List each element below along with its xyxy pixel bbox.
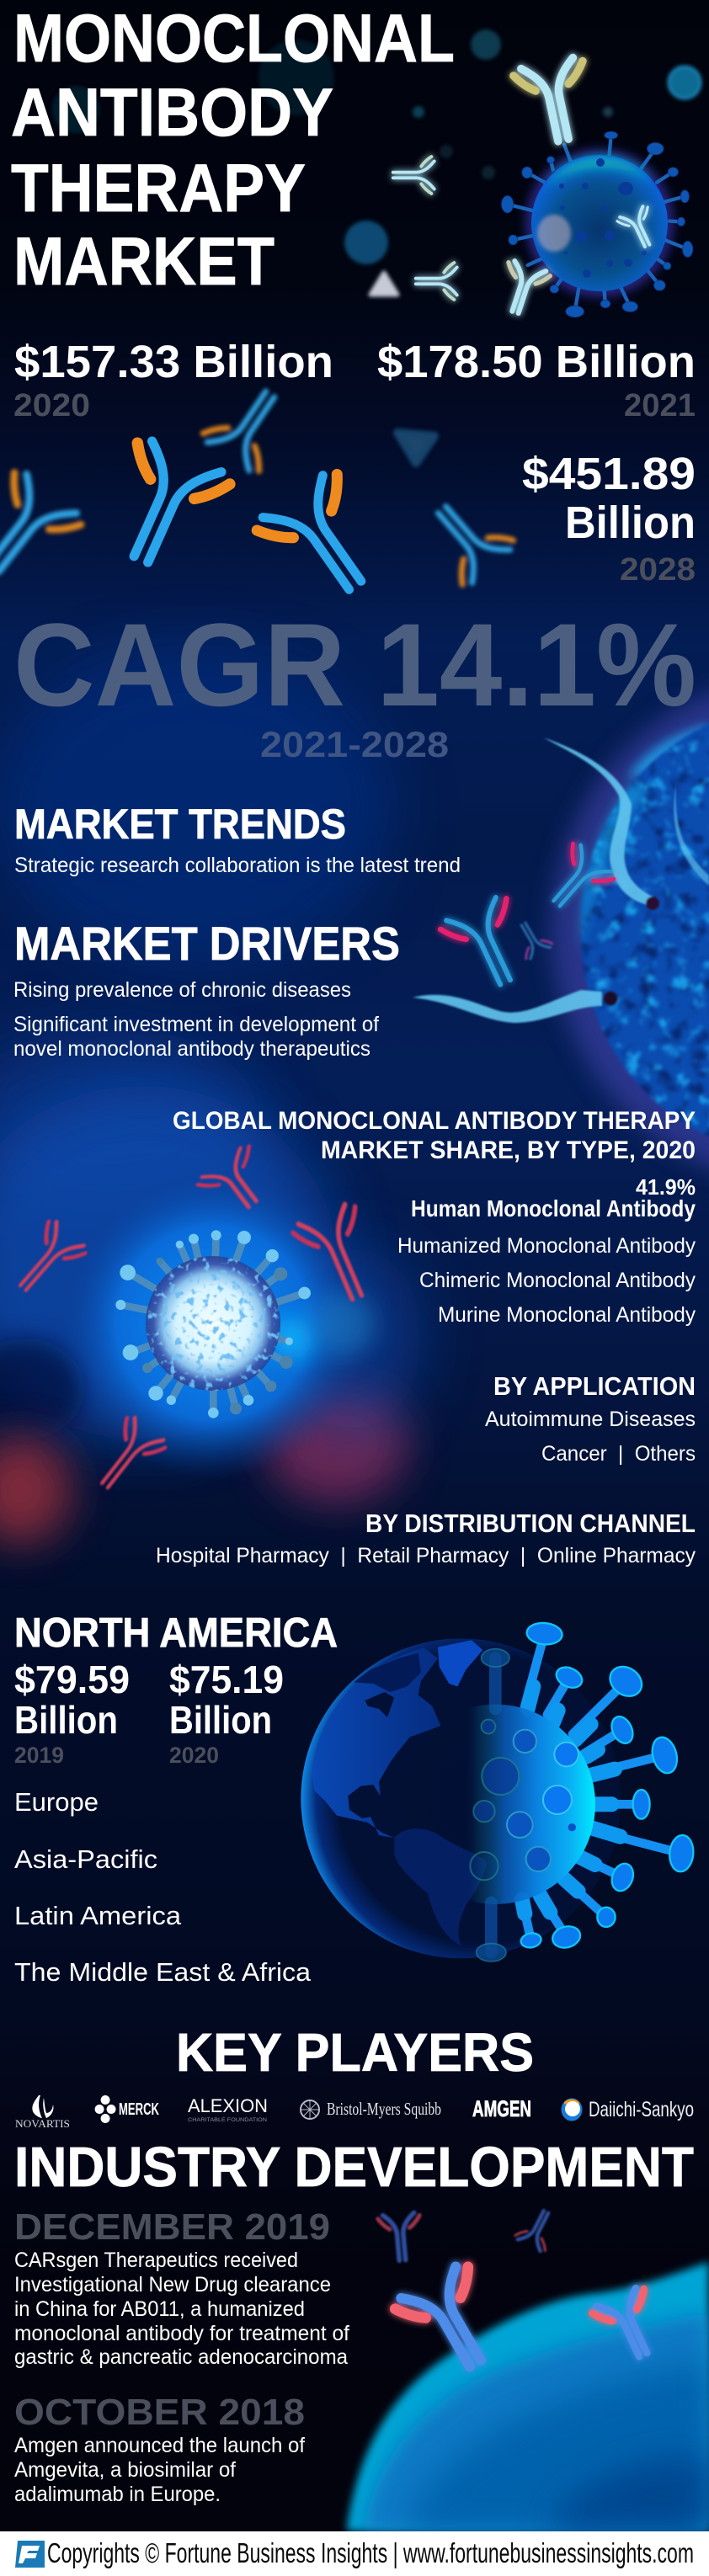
illustration: globe virus (301, 1621, 695, 1961)
globe sphere (301, 1638, 621, 1958)
by application: Autoimmune Diseases (485, 1408, 696, 1431)
market drivers (13, 917, 400, 1061)
market share by type: 41.9% (636, 1174, 696, 1200)
by application (485, 1371, 696, 1466)
development December 2019: Investigational New Drug clearance (14, 2273, 331, 2297)
title: MONOCLONAL (13, 1, 455, 77)
title (11, 1, 455, 300)
market drivers: novel monoclonal antibody therapeutics (13, 1037, 370, 1061)
market trends: MARKET TRENDS (14, 801, 346, 848)
regional figures: 2020 (169, 1743, 219, 1768)
market size figures: 2028 (620, 552, 696, 588)
market size figures: Billion (565, 498, 696, 548)
market size figures: $451.89 (522, 449, 696, 499)
logo: Bristol-Myers Squibb: Bristol-Myers Squibb (327, 2099, 441, 2119)
market size figures: 2021 (624, 388, 696, 423)
regional figures: 2019 (14, 1743, 64, 1768)
market trends (14, 801, 461, 877)
market size figures: $157.33 Billion (14, 337, 333, 387)
development December 2019: monoclonal antibody for treatment of (14, 2322, 349, 2345)
regional figures: NORTH AMERICA (14, 1610, 338, 1656)
by application: BY APPLICATION (493, 1371, 696, 1401)
development December 2019: CARsgen Therapeutics received (14, 2249, 298, 2272)
regional figures: Billion (14, 1698, 118, 1742)
regional figures: Latin America (14, 1901, 182, 1930)
logo: Alexion: CHARITABLE FOUNDATION (188, 2118, 267, 2123)
logo: Merck (95, 2095, 159, 2123)
pink tipped antibodies (438, 840, 616, 998)
development October 2018: OCTOBER 2018 (14, 2392, 305, 2433)
development December 2019: in China for AB011, a humanized (14, 2297, 305, 2321)
market drivers: Rising prevalence of chronic diseases (13, 978, 351, 1002)
logo: Novartis: NOVARTIS (15, 2117, 70, 2130)
regional figures (14, 1610, 338, 1987)
key players heading: KEY PLAYERS (176, 2022, 534, 2083)
by application: Cancer | Others (541, 1442, 696, 1466)
globe land masses (312, 1640, 487, 1946)
market share by type: Humanized Monoclonal Antibody (397, 1234, 696, 1258)
title: THERAPY (11, 151, 306, 226)
market share by type: Murine Monoclonal Antibody (438, 1303, 696, 1327)
development October 2018: Amgen announced the launch of (14, 2434, 305, 2457)
blurred antibodies mid (0, 375, 516, 593)
market share by type (173, 1107, 696, 1327)
CAGR: CAGR 14.1% (13, 599, 696, 731)
key player logos (15, 2095, 694, 2130)
icon: Fortune Business Insights logo (15, 2541, 45, 2568)
virus body (396, 1705, 595, 1904)
logo: Alexion: ALEXION (188, 2095, 268, 2116)
illustration: virus top right (502, 131, 693, 317)
development October 2018: adalimumab in Europe. (14, 2483, 221, 2506)
market trends: Strategic research collaboration is the latest trend (14, 854, 461, 877)
market size figures: $178.50 Billion (377, 337, 696, 387)
logo: Novartis (15, 2095, 70, 2130)
large speckled cell (552, 678, 709, 1183)
development October 2018: Amgevita, a biosimilar of (14, 2458, 236, 2482)
market drivers: Significant investment in development of (13, 1013, 379, 1036)
virus spikes (491, 1634, 681, 1952)
blue and red antibodies bottom (377, 2204, 669, 2385)
cell flagella (413, 737, 709, 1023)
development December 2019 (14, 2206, 349, 2369)
logo: Amgen: AMGEN (472, 2096, 531, 2121)
footer (0, 2531, 709, 2576)
regional figures: Europe (14, 1787, 99, 1817)
sharp orange and blue antibodies (95, 436, 395, 614)
regional figures: Asia-Pacific (14, 1844, 157, 1874)
market size figures (13, 337, 696, 588)
by distribution channel: Hospital Pharmacy | Retail Pharmacy | Online Pharmacy (156, 1544, 696, 1567)
regional figures: Billion (169, 1698, 272, 1742)
CAGR: 2021-2028 (260, 725, 449, 765)
antibodies attached to top virus (393, 56, 663, 319)
market share by type: Chimeric Monoclonal Antibody (419, 1269, 696, 1292)
title: ANTIBODY (11, 75, 333, 151)
development October 2018 (14, 2392, 305, 2506)
bottom cell (347, 2262, 709, 2531)
red antibodies (5, 1143, 388, 1500)
logo: Bristol-Myers Squibb (301, 2099, 441, 2119)
regional figures: $75.19 (169, 1658, 284, 1701)
market size figures: 2020 (13, 388, 90, 423)
title: MARKET (13, 224, 275, 300)
development December 2019: DECEMBER 2019 (14, 2206, 330, 2248)
development December 2019: gastric & pancreatic adenocarcinoma (14, 2345, 348, 2369)
regional figures: The Middle East & Africa (14, 1957, 312, 1987)
logo: Merck: MERCK (119, 2100, 159, 2119)
market share by type: MARKET SHARE, BY TYPE, 2020 (321, 1136, 696, 1164)
illustration: glowing virus centre (57, 1168, 375, 1479)
by distribution channel (156, 1509, 696, 1567)
dim floating cells behind title (52, 29, 701, 264)
market drivers: MARKET DRIVERS (14, 917, 400, 970)
icon: blurred white triangle (370, 273, 397, 295)
blurred small antibody (510, 917, 553, 961)
regional figures: $79.59 (14, 1658, 130, 1701)
virus surface spots (470, 1720, 578, 1880)
